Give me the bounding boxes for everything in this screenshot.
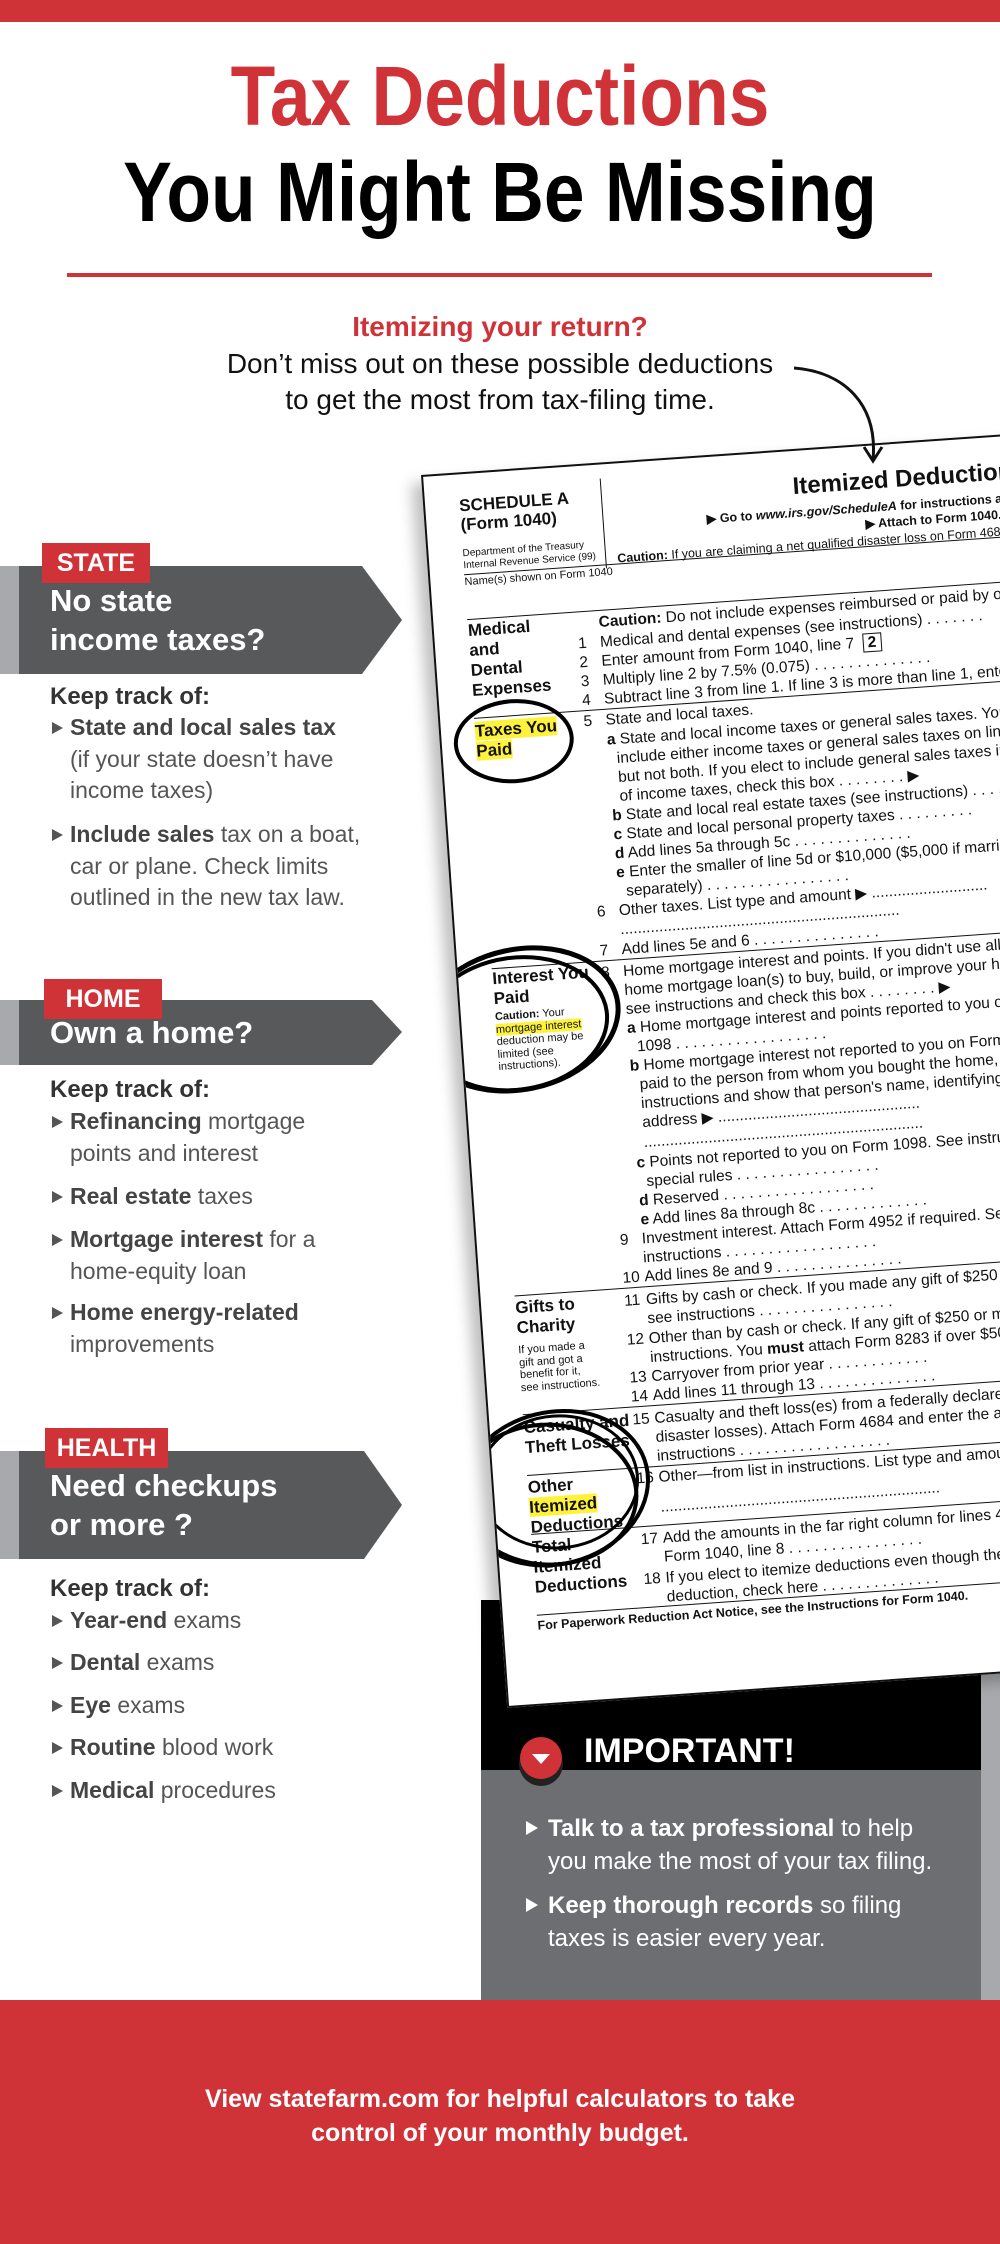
form: schedule A: Theft Losses [524, 1431, 630, 1457]
form: schedule A: e Add lines 8a through 8c . . . . . . . . . . . . . [640, 1192, 927, 1228]
form: schedule A: gift and got a [519, 1352, 583, 1369]
form: schedule A: Dental [470, 657, 523, 680]
form: schedule A: For Paperwork Reduction Act Notice, see the Instructions for Form 1040. [537, 1589, 969, 1633]
form: schedule A: Multiply line 2 by 7.5% (0.075) . . . . . . . . . . . . . . [602, 649, 931, 689]
form: schedule A [421, 426, 1000, 1708]
form: schedule A: Medical [467, 617, 531, 640]
form: schedule A: Casualty and [523, 1411, 630, 1437]
footer: control of your monthly budget. [311, 2119, 689, 2147]
form: schedule A: Charity [516, 1314, 576, 1337]
title underline [67, 273, 932, 277]
form: schedule A: 11 [624, 1292, 641, 1310]
form: schedule A: 12 [626, 1331, 645, 1349]
panel: health: Dental exams [70, 1649, 214, 1675]
form: schedule A: Department of the Treasury [462, 540, 584, 559]
intro text: to get the most from tax-filing time. [285, 384, 715, 415]
form: schedule A: 6 [596, 903, 606, 921]
form: schedule A: instructions . . . . . . . . . . . . . . . . . . [643, 1233, 877, 1266]
form: schedule A: deduction, check here . . . . . . . . . . . . . . [666, 1570, 939, 1606]
form: schedule A: 14 [630, 1387, 649, 1406]
panel: state: car or plane. Check limits [70, 852, 328, 878]
form: schedule A: Interest You [492, 963, 589, 988]
footer [0, 2000, 1000, 2244]
panel: home: Keep track of: [50, 1076, 210, 1103]
form: schedule A: instructions). [498, 1057, 561, 1073]
title: Tax Deductions [231, 49, 769, 143]
form: schedule A: 18 [643, 1570, 661, 1588]
panel: state: (if your state doesn’t have [70, 746, 333, 772]
form: schedule A: Total [531, 1535, 572, 1557]
form: schedule A: Internal Revenue Service (99) [463, 551, 596, 571]
important bullets: taxes is easier every year. [548, 1925, 825, 1952]
panel: home: HOME [66, 985, 140, 1013]
form: schedule A: mortgage interest [495, 1018, 582, 1036]
form: schedule A: SCHEDULE A [459, 489, 570, 515]
panel: health: Keep track of: [50, 1575, 210, 1602]
important: header [519, 1732, 795, 1786]
form: schedule A: 2 [579, 654, 589, 671]
panel: health [0, 1428, 402, 1803]
panel: health: HEALTH [57, 1434, 156, 1462]
form: schedule A: Itemized [533, 1553, 602, 1577]
important bullets: Keep thorough records so filing [548, 1892, 901, 1919]
form: schedule A: of income taxes, check this box . . . . . . . . ▶ [619, 767, 920, 805]
form: schedule A: Medical and dental expenses (see instructions) . . . . . . . [600, 607, 983, 651]
form: schedule A: Paid [493, 987, 530, 1008]
panel: health: or more ? [50, 1507, 193, 1542]
panel: home: improvements [70, 1330, 214, 1356]
form: schedule A: benefit for it, [520, 1365, 581, 1381]
panel: state: Keep track of: [50, 683, 210, 710]
circles [454, 699, 650, 1568]
form: schedule A: b State and local real estate taxes (see instructions) . . . . . [612, 780, 1000, 824]
form: schedule A: 16 [636, 1469, 654, 1487]
panel: health: Eye exams [70, 1692, 185, 1718]
form: schedule A: see instructions and check this box . . . . . . . . ▶ [625, 978, 951, 1018]
panel: home: points and interest [70, 1140, 258, 1166]
panel: health: Need checkups [50, 1468, 277, 1503]
intro text [227, 311, 773, 415]
form: schedule A: (Form 1040) [460, 509, 557, 534]
form: schedule A: Carryover from prior year . . . . . . . . . . . . [651, 1349, 928, 1385]
form: schedule A: Other taxes. List type and amount ▶ ........................... [618, 877, 988, 919]
form: schedule A: 10 [622, 1269, 640, 1287]
form: schedule A: Form 1040, line 8 . . . . . . . . . . . . . . . . [663, 1531, 922, 1566]
form: schedule A: ................................................................. [620, 902, 900, 938]
important bullets: you make the most of your tax filing. [548, 1848, 932, 1875]
form: schedule A: separately) . . . . . . . . . . . . . . . . . [626, 867, 849, 900]
form: schedule A: 3 [580, 673, 590, 690]
important bullets: Talk to a tax professional to help [548, 1815, 913, 1842]
intro text: Itemizing your return? [352, 311, 648, 342]
form: schedule A: 8 [601, 964, 610, 982]
form: schedule A: d Add lines 5a through 5c . . . . . . . . . . . . . . [614, 825, 911, 862]
form: schedule A: special rules . . . . . . . . . . . . . . . . . [646, 1157, 879, 1190]
icon: red circle chevron [519, 1737, 563, 1786]
title: You Might Be Missing [123, 145, 877, 239]
form: schedule A: 4 [582, 692, 591, 709]
form: schedule A: 7 [599, 942, 609, 960]
panel: home [0, 979, 402, 1357]
form: schedule A: Name(s) shown on Form 1040 [464, 566, 613, 588]
panel: state: income taxes) [70, 777, 213, 803]
form: schedule A: Gifts to [515, 1294, 575, 1317]
form: schedule A: 15 [632, 1410, 650, 1429]
panel: home: Real estate taxes [70, 1183, 253, 1209]
top red bar [0, 0, 1000, 22]
panel: health: Year-end exams [70, 1607, 241, 1633]
form: schedule A: 1098 . . . . . . . . . . . . . . . . . . [636, 1025, 827, 1055]
panel: health: Routine blood work [70, 1734, 273, 1760]
panel: state: No state [50, 583, 172, 618]
form: schedule A: deduction may be [496, 1030, 584, 1048]
form: schedule A: Add lines 11 through 13 . . . . . . . . . . . . . . [652, 1367, 936, 1404]
form: schedule A: address ▶ ............................................... [642, 1095, 920, 1131]
form: schedule A: limited (see [497, 1045, 554, 1061]
form: schedule A: ................................................................. [643, 1115, 924, 1151]
panel: home: Home energy-related [70, 1299, 299, 1325]
panel: state: income taxes? [50, 622, 265, 657]
form: schedule A: Deductions [534, 1571, 628, 1597]
title [123, 49, 877, 239]
form: schedule A: see instructions . . . . . . . . . . . . . . . . [647, 1293, 893, 1327]
form: schedule A: 13 [629, 1368, 647, 1387]
panel: home: Refinancing mortgage [70, 1108, 305, 1134]
form: schedule A: Caution: If you are claiming a net qualified disaster loss on Form 4684 [617, 524, 1000, 565]
panel: health: Medical procedures [70, 1777, 276, 1803]
form: schedule A: Caution: Your [495, 1006, 565, 1023]
form: schedule A: Other [527, 1475, 574, 1497]
form: schedule A: ................................................................. [660, 1479, 940, 1516]
form: schedule A: State and local taxes. [605, 701, 754, 729]
panel: home: home-equity loan [70, 1258, 246, 1284]
intro text: Don’t miss out on these possible deductions [227, 348, 773, 379]
form: schedule A: If you made a [518, 1340, 585, 1356]
form: schedule A: Enter amount from Form 1040, line 7 2 [601, 634, 877, 670]
form: schedule A: 5 [583, 713, 593, 730]
form: schedule A: 9 [619, 1231, 629, 1249]
form: schedule A: instructions . . . . . . . . . . . . . . . . . . [656, 1432, 890, 1465]
form: schedule A: see instructions. [520, 1376, 601, 1394]
panel: state: STATE [57, 549, 135, 577]
form: schedule A: Add lines 5e and 6 . . . . . . . . . . . . . . . [621, 923, 879, 958]
panel: home: Mortgage interest for a [70, 1226, 315, 1252]
panel: home: Own a home? [50, 1015, 253, 1050]
form: schedule A: 1 [578, 635, 587, 652]
panel: important box [481, 1600, 1000, 2000]
form: schedule A: ▶ Attach to Form 1040. [865, 508, 1000, 531]
form: schedule A: Add lines 8e and 9 . . . . . . . . . . . . . . . [644, 1250, 902, 1285]
footer: View statefarm.com for helpful calculators to take [205, 2085, 795, 2113]
panel: state: State and local sales tax [70, 714, 336, 740]
panel: state: outlined in the new tax law. [70, 884, 345, 910]
panel: state: Include sales tax on a boat, [70, 821, 360, 847]
form: schedule A: and [469, 639, 500, 660]
form: schedule A: d Reserved . . . . . . . . . . . . . . . . . . [639, 1176, 874, 1210]
form: schedule A: Expenses [471, 675, 552, 700]
form: schedule A: Taxes You [474, 716, 558, 741]
panel: state [0, 543, 402, 910]
heading: important: IMPORTANT! [584, 1732, 795, 1770]
form: schedule A: Paid [476, 739, 513, 761]
form: schedule A: Deductions [530, 1511, 624, 1537]
arrow: intro to form [794, 366, 884, 464]
important bullets [526, 1815, 932, 1952]
form: schedule A: c State and local personal property taxes . . . . . . . . . [613, 801, 973, 843]
form: schedule A: Itemized [529, 1493, 598, 1517]
form: schedule A: 17 [640, 1530, 659, 1548]
